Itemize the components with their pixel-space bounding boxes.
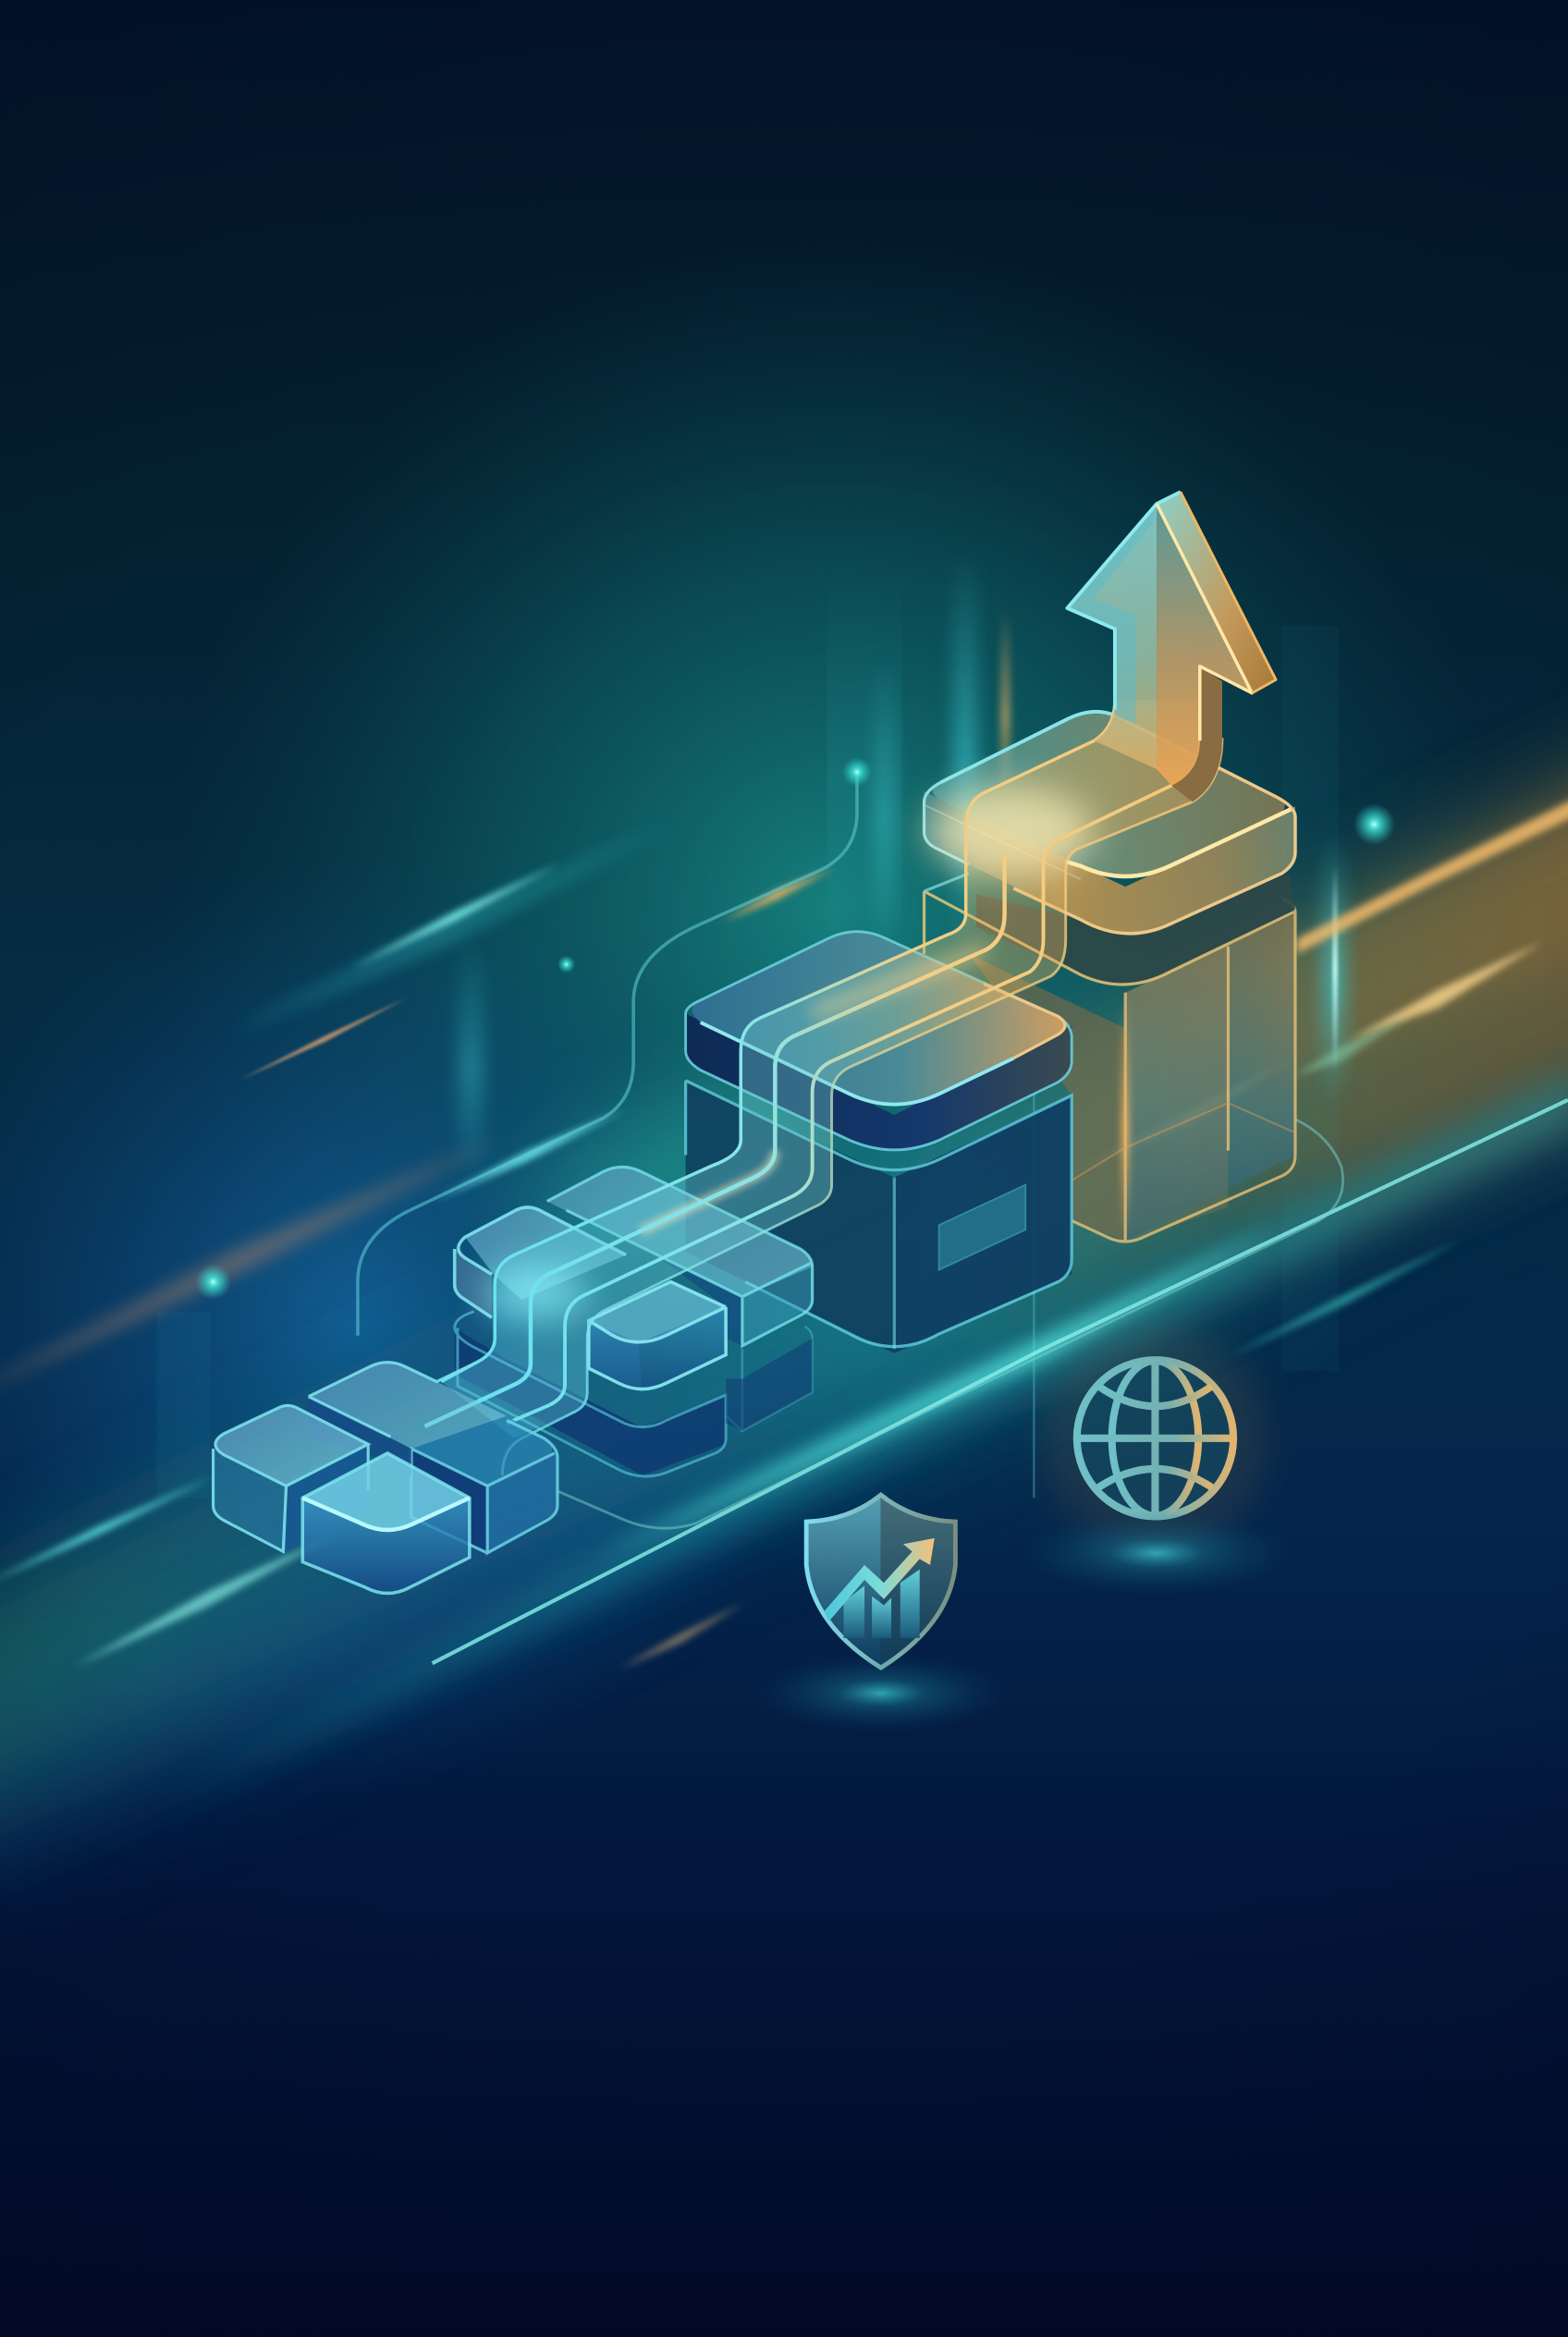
small block cluster: back block [547, 1167, 813, 1346]
ribbon fill [441, 701, 1200, 1438]
glowing nodes [195, 757, 1395, 1300]
thin wire line with node [358, 772, 857, 1336]
small block cluster: bottom-right block [411, 1416, 557, 1553]
ribbon glow spots [928, 787, 1093, 876]
box right wall [1125, 913, 1295, 1242]
icon: globe [1044, 1327, 1267, 1550]
shield right half [881, 1495, 955, 1668]
arrow front right half [1157, 504, 1252, 786]
arrow front left half [1067, 504, 1157, 769]
slab top [692, 932, 1065, 1105]
shield floor glow [754, 1655, 1008, 1731]
slab sides [925, 791, 1295, 934]
small block cluster: front cube [302, 1453, 470, 1593]
slab side [686, 1013, 1072, 1150]
arrow edges [1067, 492, 1181, 709]
small block cluster: front block [589, 1282, 726, 1392]
arrow bevel [1067, 504, 1157, 725]
ribbon line D [502, 738, 1222, 1475]
chart bars [843, 1570, 920, 1638]
right tower: upper slab [925, 712, 1295, 934]
globe floor glow [1020, 1511, 1293, 1595]
ribbon line C [507, 740, 1200, 1424]
translucent ribbon path [424, 701, 1222, 1475]
ribbon line B [424, 854, 1005, 1426]
right tower: large translucent box [969, 899, 1295, 1242]
box outline [1072, 899, 1295, 1242]
small block cluster: middle-left block [455, 1207, 626, 1317]
middle tower: top slab [686, 932, 1072, 1150]
small block cluster: reflections [455, 1312, 813, 1476]
shield left half [806, 1495, 881, 1668]
right tower: lower slab [925, 874, 1295, 985]
light streaks [0, 796, 1568, 1670]
box left wall [969, 954, 1125, 1242]
arrow head right side [1157, 492, 1276, 693]
chart arrow [825, 1538, 935, 1621]
diagonal light band [0, 579, 1568, 2086]
box left wall [686, 1081, 894, 1353]
small block cluster: left cube [214, 1405, 368, 1551]
ribbon line A [441, 701, 1115, 1382]
slab top [933, 713, 1285, 876]
slab outlines [686, 932, 1072, 1150]
main glowing diagonal line [149, 1071, 1568, 1811]
base outline loop [556, 1120, 1343, 1528]
vertical light beams [156, 552, 1344, 1498]
shield outline [806, 1495, 955, 1668]
inset panel [939, 1185, 1025, 1270]
middle tower: translucent box [686, 1081, 1072, 1353]
slab outlines [940, 712, 1115, 782]
icon: shield with growth chart [806, 1495, 955, 1668]
arrow shaft dark side [1171, 667, 1222, 801]
small block cluster: back-left block [309, 1363, 507, 1475]
3D arrow [1067, 492, 1276, 801]
box outline [686, 1081, 1072, 1347]
box right wall [894, 1095, 1072, 1353]
